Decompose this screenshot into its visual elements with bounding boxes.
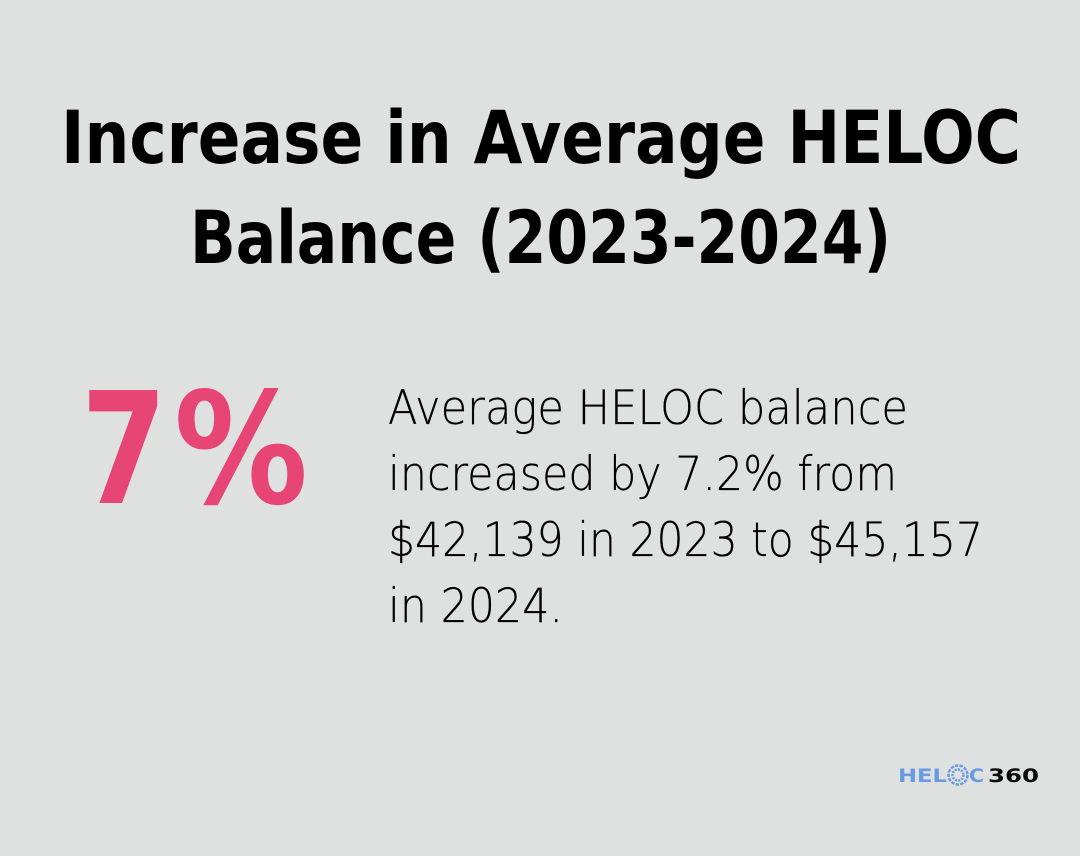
title: Balance (2023-2024): [190, 196, 891, 281]
big stat: 7%: %: [174, 359, 308, 540]
stat description: Average HELOC balance: [388, 381, 908, 436]
big stat: 7%: [81, 359, 308, 540]
stat description: increased by 7.2% from: [388, 447, 897, 502]
stat description: $42,139 in 2023 to $45,157: [388, 513, 983, 568]
title: [61, 96, 1021, 281]
logo: HELOC360: [898, 765, 1039, 787]
logo: HELOC360: 360: [988, 765, 1039, 787]
icon: swirl in logo: [948, 766, 968, 784]
stat description: in 2024.: [388, 579, 563, 634]
logo: HELOC360: HEL: [898, 765, 947, 787]
logo: HELOC360: C: [969, 765, 984, 787]
big stat: 7%: 7: [81, 359, 167, 540]
stat description: [388, 381, 983, 634]
